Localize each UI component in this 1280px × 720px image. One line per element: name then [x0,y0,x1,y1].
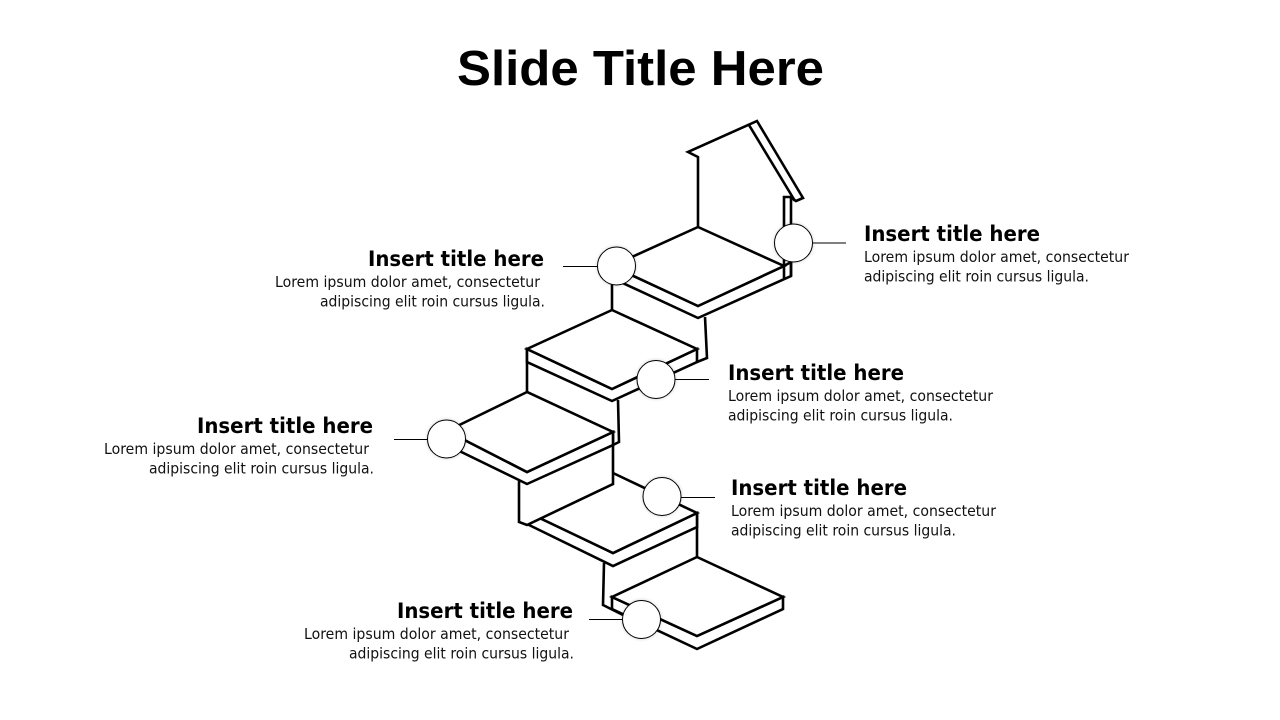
step 3 riser [519,400,619,525]
text block: upper left [275,247,545,310]
step 5 bottom slab [612,557,783,649]
step 2 slab [527,310,697,401]
marker: bottom left [589,600,660,638]
text block: middle left: adipiscing elit roin cursus ligula. [149,460,374,478]
top step slab [612,227,791,318]
marker: upper left [563,247,636,285]
text block: lower right: adipiscing elit roin cursus ligula. [731,522,956,540]
text block: top right: adipiscing elit roin cursus ligula. [864,268,1089,286]
text block: middle right [728,361,994,424]
text block: middle right: adipiscing elit roin cursus ligula. [728,406,953,424]
staircase illustration [447,121,803,649]
text block: middle left: Lorem ipsum dolor amet, consectetur [104,440,370,458]
text block: lower right [731,476,997,540]
step 4 slab [527,473,697,566]
text block: top right: Lorem ipsum dolor amet, consectetur [864,248,1130,266]
text block: middle right: Lorem ipsum dolor amet, consectetur [728,387,994,405]
step 3 slab [447,392,613,484]
text block: lower right: Lorem ipsum dolor amet, consectetur [731,502,997,520]
marker: middle right [637,360,709,398]
marker: top right [774,224,846,262]
text block: upper left: Lorem ipsum dolor amet, consectetur [275,273,541,291]
text block: top right [864,222,1130,286]
text block: middle left: Insert title here [197,414,373,438]
top step riser [611,266,613,310]
text block: lower right: Insert title here [731,476,907,500]
marker: middle left [394,420,466,458]
step 5 riser and leg [603,563,623,615]
text block: bottom left: Lorem ipsum dolor amet, consectetur [304,625,570,643]
marker: lower right [643,478,715,516]
text block: middle left [104,414,374,478]
text block: bottom left [304,599,574,662]
step 2 riser and leg [527,317,707,392]
text block: upper left: Insert title here [368,247,544,271]
house wall and roof [688,121,803,279]
text block: middle right: Insert title here [728,361,904,385]
text block: upper left: adipiscing elit roin cursus ligula. [320,292,545,310]
text block: bottom left: adipiscing elit roin cursus ligula. [349,644,574,662]
title: Slide Title Here [457,42,824,96]
text block: top right: Insert title here [864,222,1040,246]
text block: bottom left: Insert title here [397,599,573,623]
